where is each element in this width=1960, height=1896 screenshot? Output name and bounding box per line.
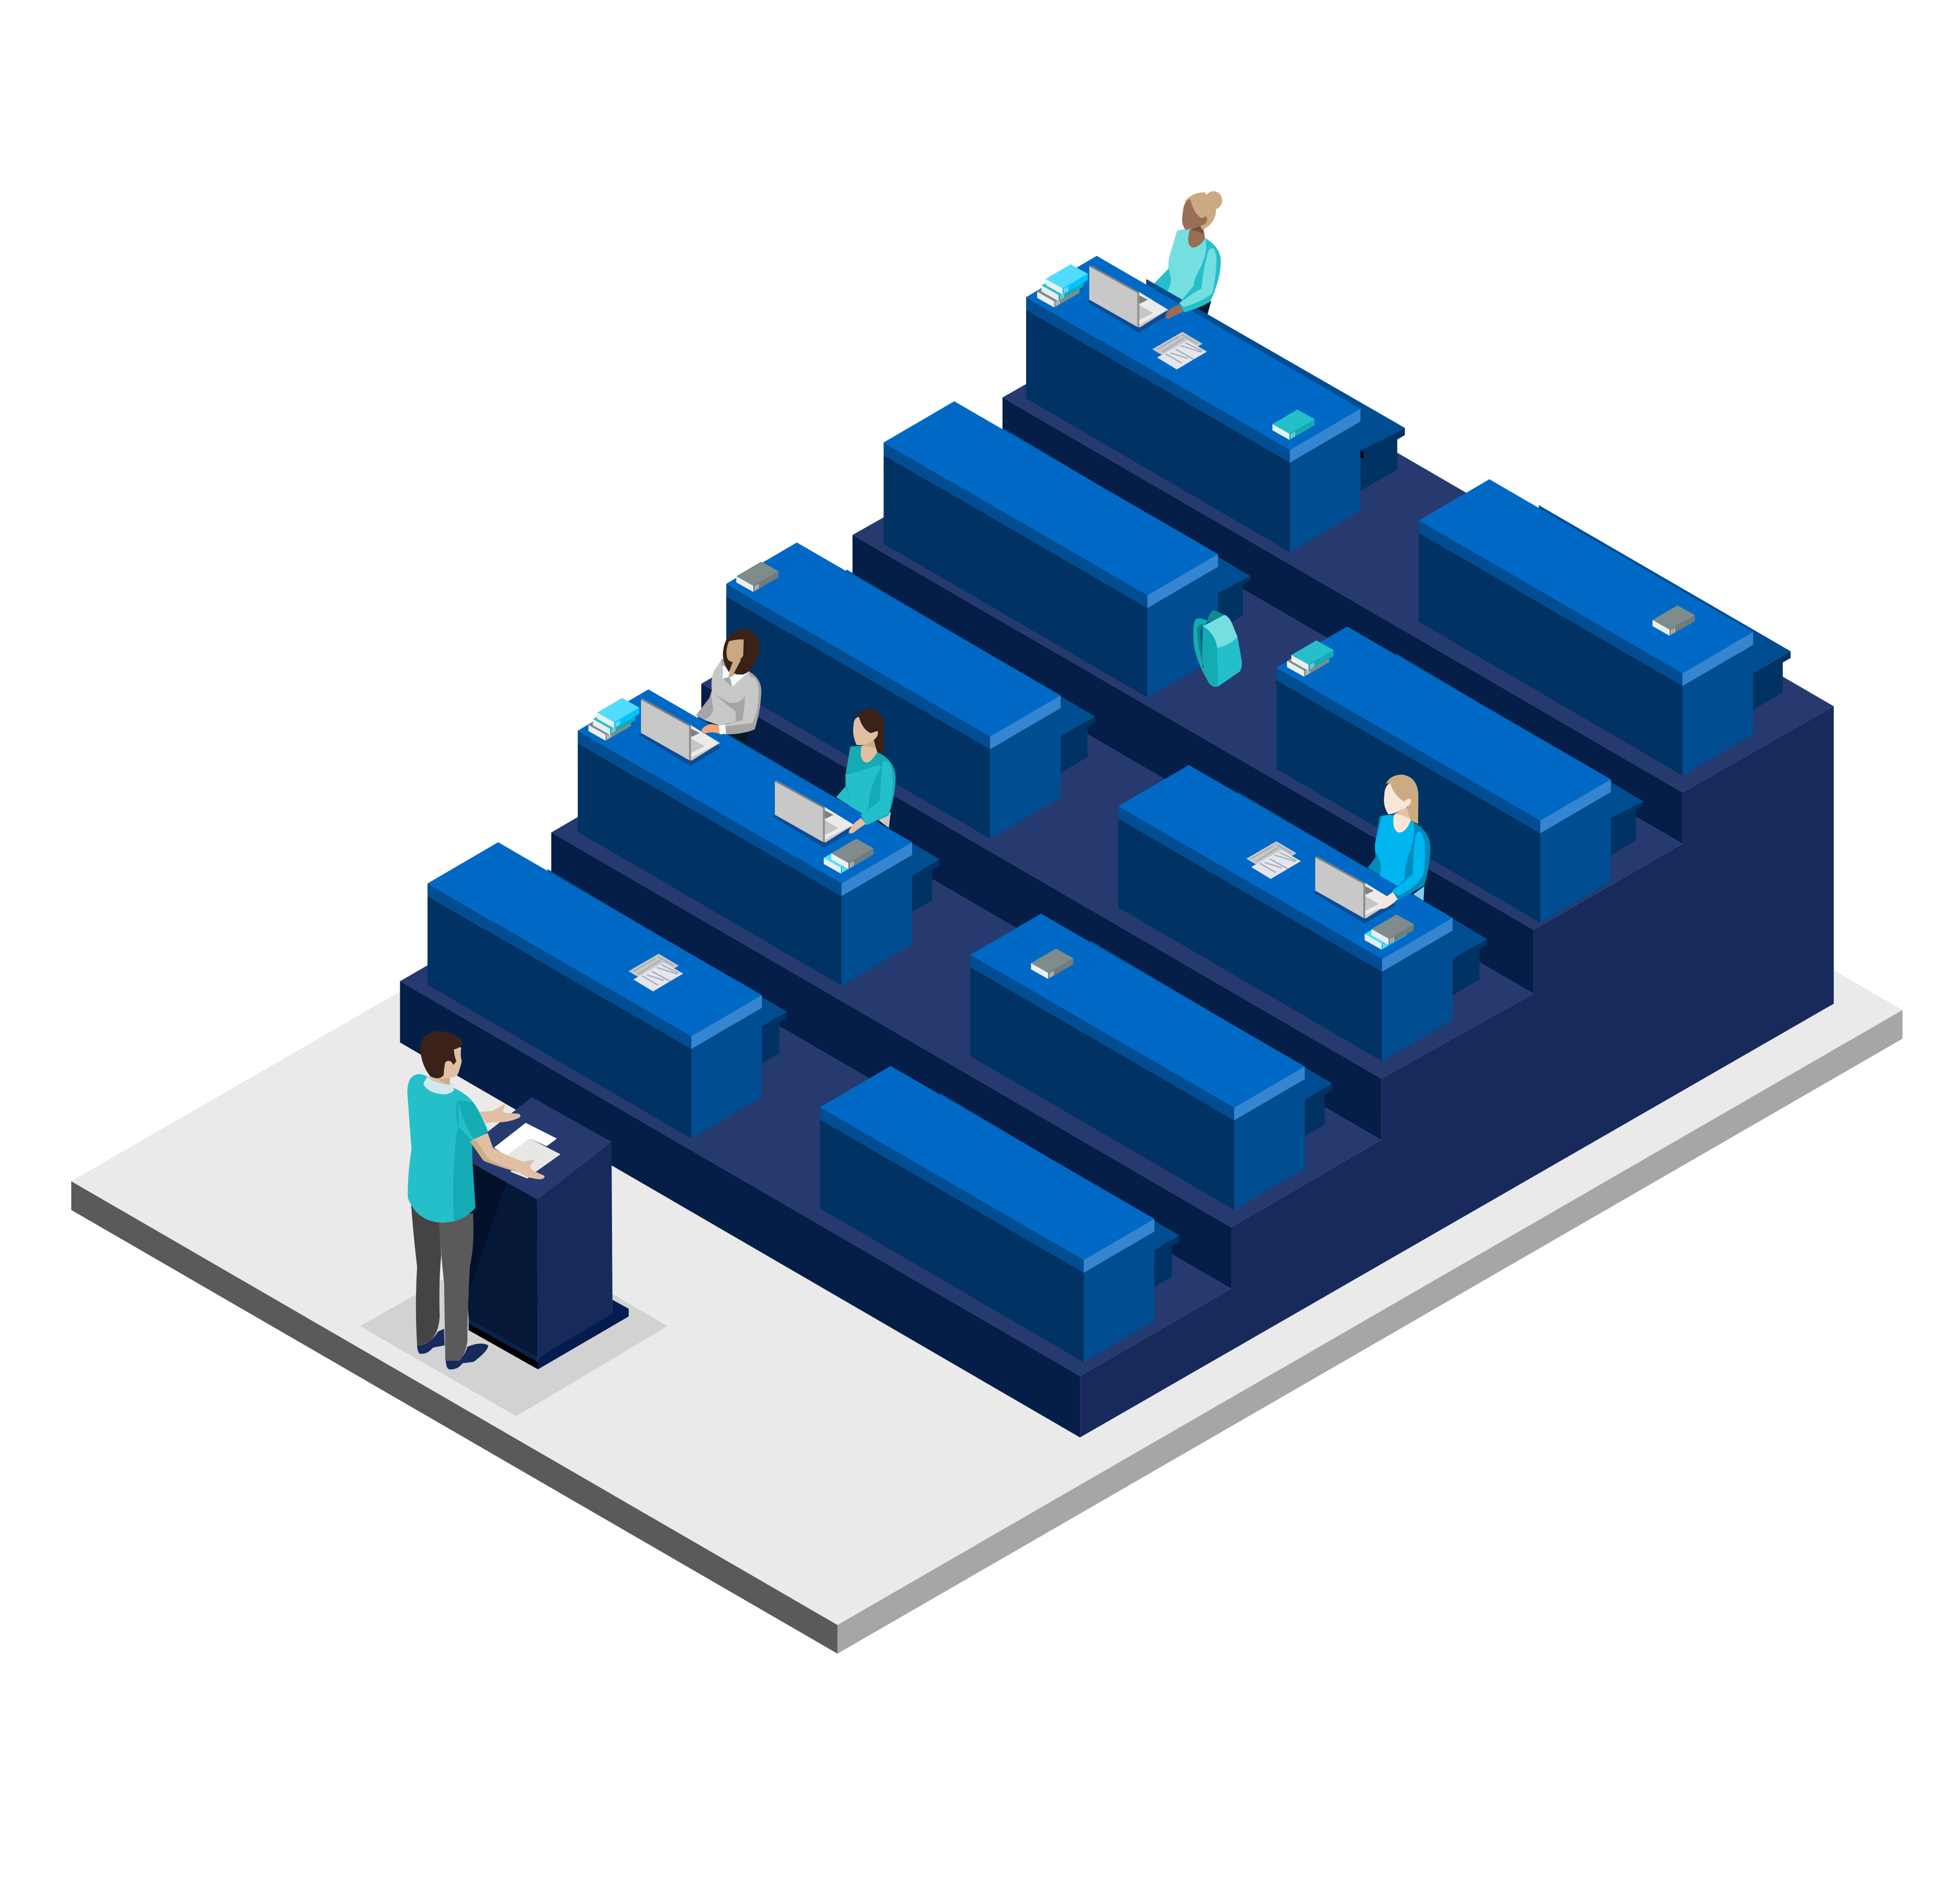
book: back row right end bbox=[1273, 409, 1315, 440]
arm: grey sweater student bbox=[702, 723, 755, 734]
papers on lectern bbox=[494, 1123, 561, 1178]
book stack: third row right bbox=[1365, 915, 1414, 950]
lectern bbox=[458, 1097, 629, 1370]
presenter floor shadow bbox=[360, 1237, 667, 1416]
laptop: third row bbox=[1312, 856, 1396, 924]
laptop: back row bbox=[1086, 265, 1169, 333]
presenter shirt bbox=[407, 1074, 488, 1223]
desk: third row left bbox=[726, 542, 1095, 839]
arm: blonde student bbox=[1379, 832, 1427, 909]
desk: front row right bbox=[820, 1066, 1179, 1362]
desk: second row right bbox=[970, 914, 1332, 1210]
presenter head bbox=[420, 1031, 463, 1085]
desk: fourth row right bbox=[1276, 626, 1643, 923]
desk: second row left bbox=[578, 689, 940, 986]
laptop: second row middle bbox=[772, 780, 855, 848]
papers: third row bbox=[1246, 841, 1301, 879]
papers: back row bbox=[1152, 332, 1207, 369]
person: student with bun hair bbox=[1151, 191, 1222, 319]
tiered seating steps bbox=[400, 311, 1834, 1437]
person: presenter bbox=[407, 1031, 545, 1370]
book stack: fourth row bbox=[1287, 640, 1334, 677]
book: back row right desk bbox=[1653, 605, 1695, 636]
presenter far arm bbox=[479, 1103, 520, 1124]
person: student in teal sweater bbox=[836, 709, 895, 828]
desk: back row left bbox=[1026, 256, 1405, 552]
person: student in grey sweater bbox=[696, 628, 761, 746]
book stack: second row left bbox=[588, 698, 639, 741]
book stack: second row right end bbox=[824, 839, 873, 874]
presenter near arm bbox=[470, 1133, 545, 1179]
presenter legs and shoes bbox=[411, 1203, 488, 1370]
desk: third row right bbox=[1118, 765, 1487, 1061]
icon: backpack bbox=[1193, 611, 1242, 687]
platform floor bbox=[71, 567, 1902, 1654]
book: third row left bbox=[736, 562, 779, 592]
arm: bun hair student bbox=[1165, 248, 1220, 319]
person: blonde student bbox=[1368, 774, 1431, 901]
desk: front row left bbox=[428, 842, 787, 1138]
laptop: second row left bbox=[638, 698, 721, 766]
desk: fourth row left bbox=[883, 401, 1250, 697]
arm: teal sweater student bbox=[848, 761, 893, 833]
desk: back row right bbox=[1419, 479, 1790, 775]
book: second row right bbox=[1031, 949, 1073, 979]
book stack: back row left bbox=[1037, 264, 1088, 307]
papers: front row bbox=[628, 954, 683, 991]
